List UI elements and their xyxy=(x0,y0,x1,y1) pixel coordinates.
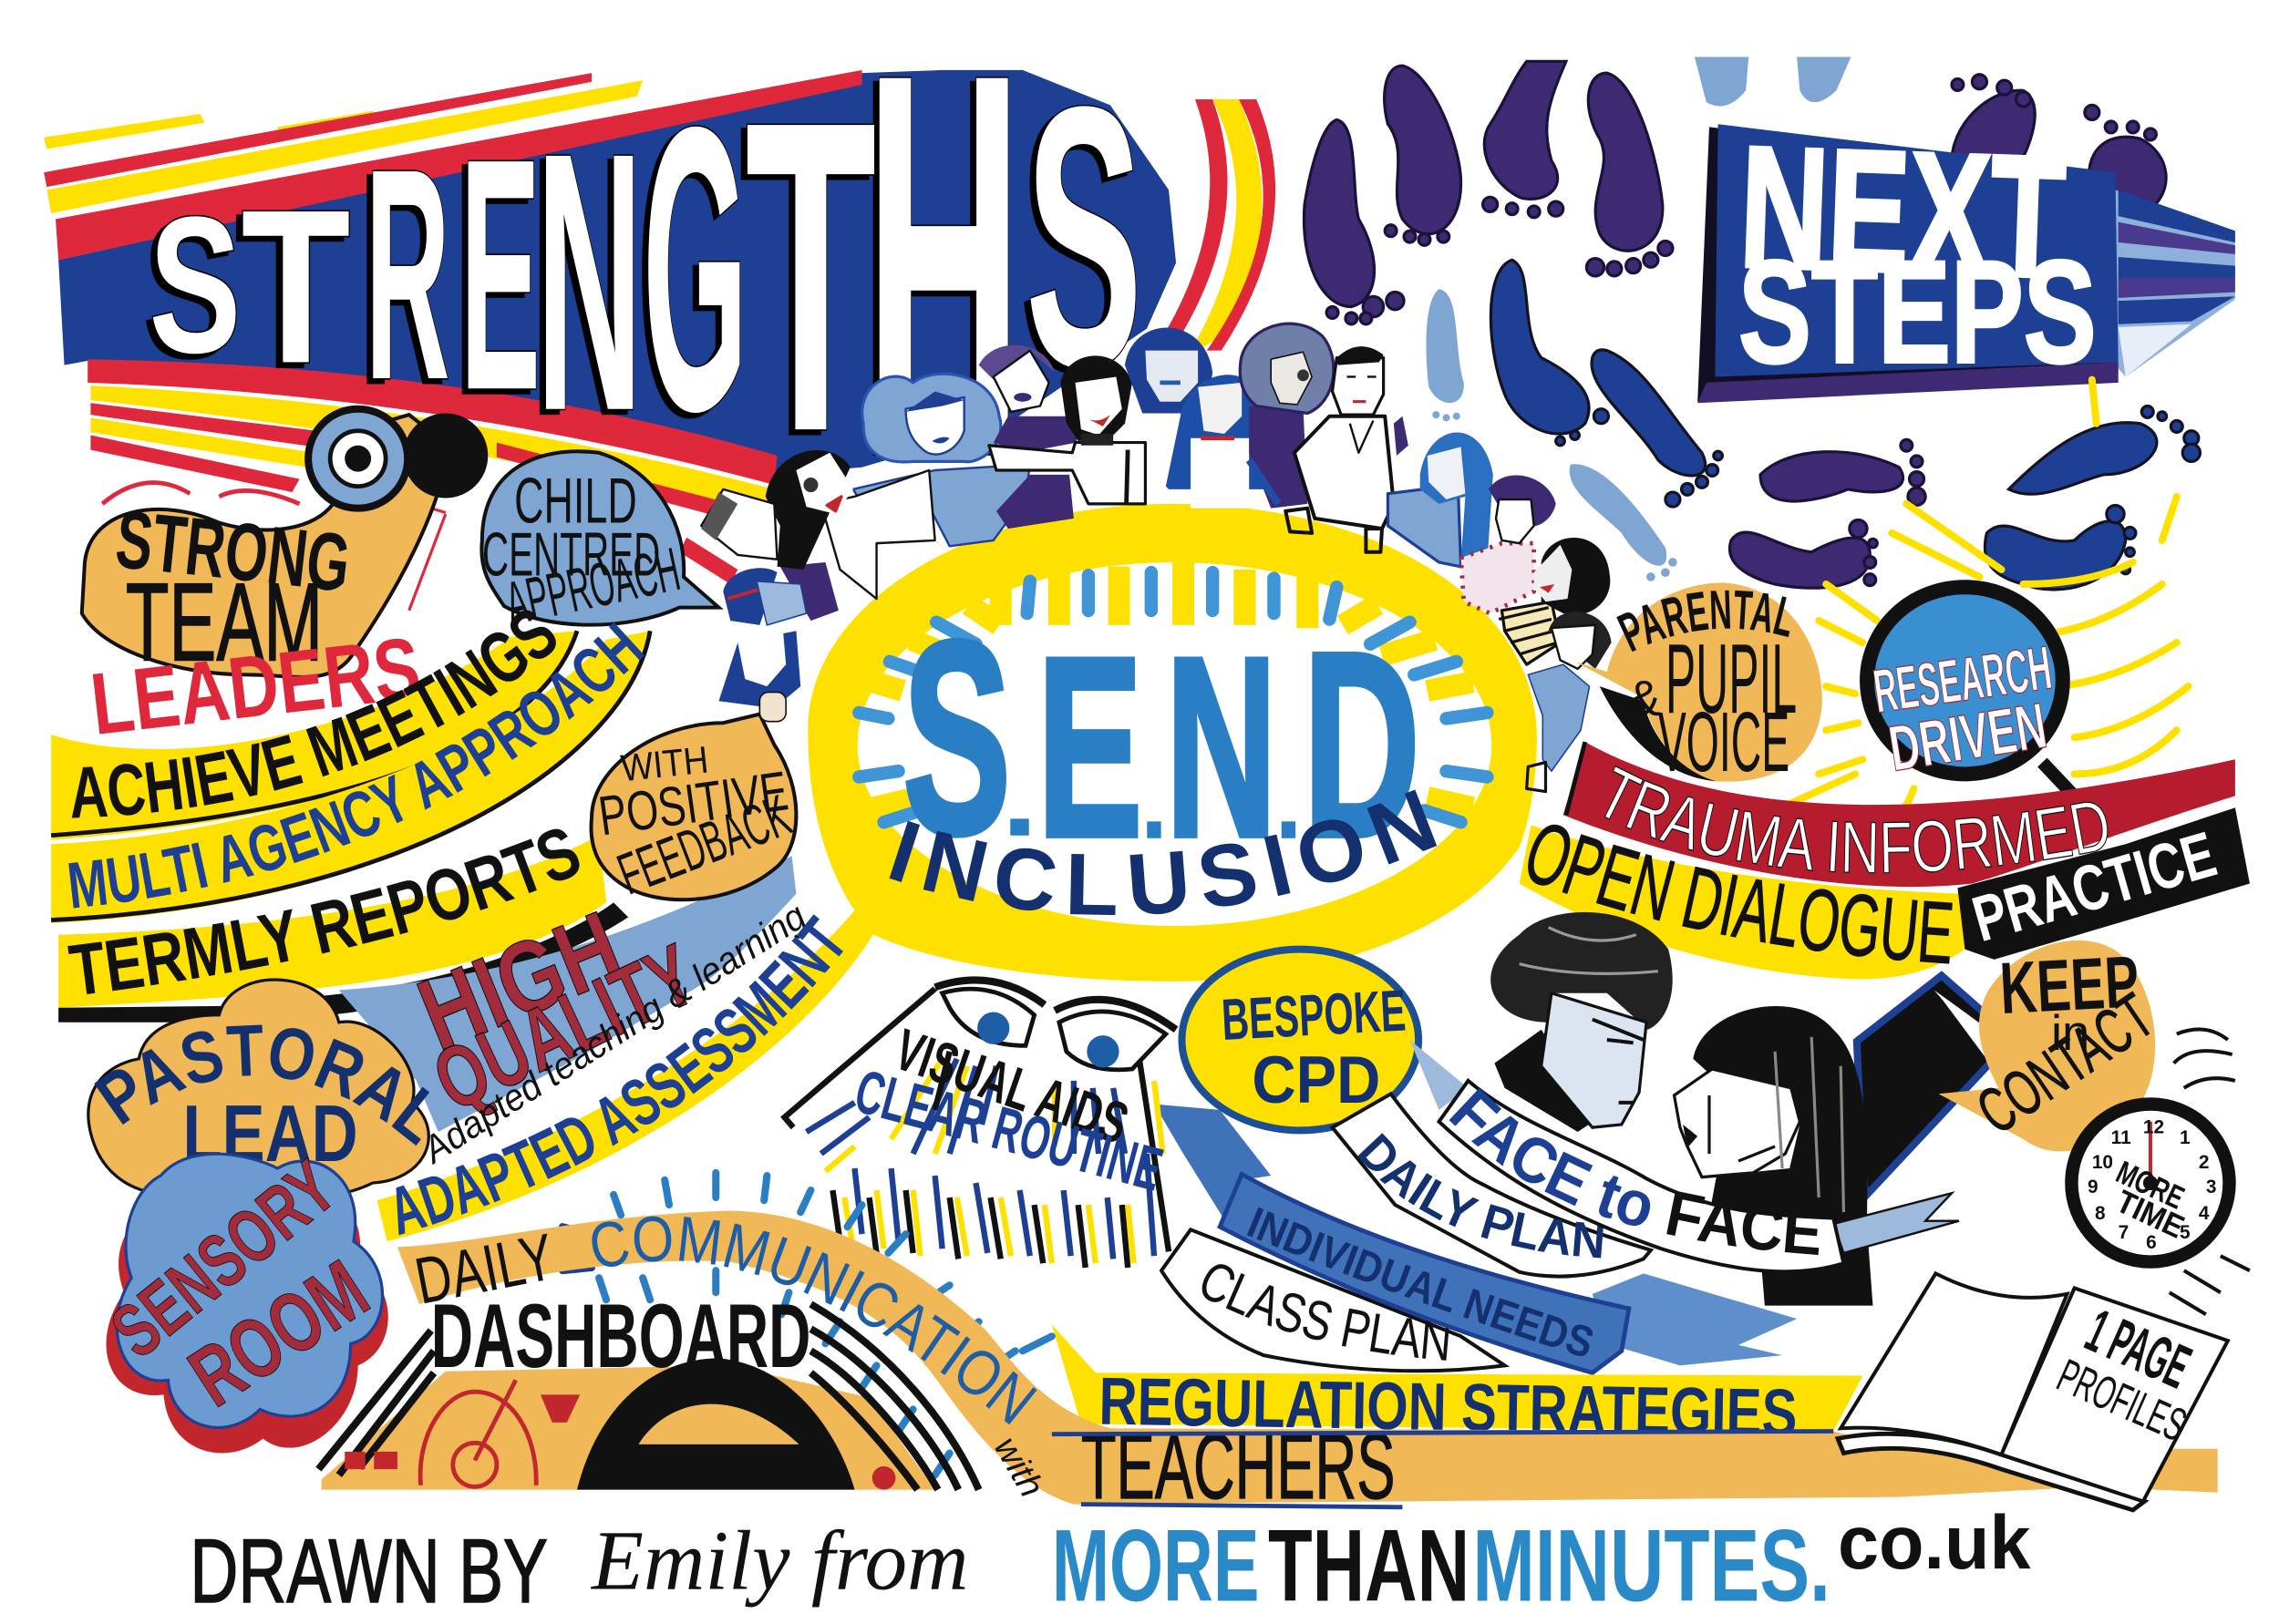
credit: more than minutes: MINUTES. xyxy=(1472,1507,1830,1622)
text: strong team: TEAM xyxy=(126,560,323,684)
icon: clock: TIME xyxy=(2110,1184,2190,1246)
panel: bespoke cpd: CPD xyxy=(1252,1042,1380,1117)
text: inclusion: INCLUSION xyxy=(890,789,1437,915)
credit: more than minutes: MORE xyxy=(1052,1507,1259,1622)
credit: drawn by emily xyxy=(190,1515,969,1622)
panel: face to face ribbon: FACE to FACE xyxy=(1449,1088,1820,1256)
credit: drawn by emily: DRAWN BY xyxy=(190,1521,548,1622)
panel: dashboard: DASHBOARD xyxy=(431,1286,810,1387)
icon: clock: 9 xyxy=(2088,1177,2099,1197)
title: strengths lettering: S xyxy=(149,177,241,394)
panel: parental and pupil voice bubble: PARENTAL xyxy=(1616,591,1790,653)
credit: drawn by emily: Emily from xyxy=(590,1515,969,1609)
icon: speedometer xyxy=(420,1380,536,1486)
title: send: N xyxy=(1166,605,1277,890)
icon: phone xyxy=(1857,975,2013,1196)
figure: man with scribbled hair xyxy=(701,489,778,560)
panel: visual aids eyes: VISUAL AIDS xyxy=(887,1016,1136,1156)
panel: daily communication band xyxy=(361,1168,2224,1518)
icon: motion lines near clock xyxy=(2170,1029,2250,1314)
text: adapted teaching: Adapted teaching & learning xyxy=(413,894,813,1172)
panel: termly reports band: TERMLY REPORTS xyxy=(67,829,580,994)
panel: with positive feedback bubble: POSITIVE xyxy=(595,759,791,848)
credit: more than minutes xyxy=(1052,1500,2031,1622)
icon: clock: 6 xyxy=(2146,1232,2157,1253)
icon: dumbbell xyxy=(308,409,488,509)
icon: clock: 1 xyxy=(2180,1127,2191,1148)
panel: individual needs ribbon xyxy=(1160,1105,1797,1374)
panel: keep in contact: KEEP xyxy=(1998,940,2140,1029)
panel: child centred speech bubble: APPROACH xyxy=(500,535,686,639)
panel: parental and pupil voice bubble: VOICE xyxy=(1658,694,1789,789)
title: strengths lettering: G xyxy=(643,44,748,496)
panel: with positive feedback bubble: WITH xyxy=(619,738,710,789)
panel: dashboard xyxy=(318,1286,979,1490)
title: next steps xyxy=(1738,111,2097,393)
panel: parental and pupil voice bubble: & xyxy=(1627,671,1661,726)
panel: parental and pupil voice bubble: PUPIL xyxy=(1665,623,1797,735)
icon: clock: 11 xyxy=(2111,1127,2131,1148)
panel: individual needs ribbon: INDIVIDUAL NEEDS xyxy=(1247,1207,1593,1356)
panel: regulation strategies band: REGULATION STRATEGIES xyxy=(1098,1362,1798,1451)
figure: man in white shirt xyxy=(1285,346,1408,552)
panel: send yellow ring xyxy=(808,503,1537,982)
panel: bespoke cpd: BESPOKE xyxy=(1220,978,1408,1053)
title: send: . xyxy=(1145,769,1163,851)
figure: purple haired woman xyxy=(979,345,1077,453)
title: strengths lettering: T xyxy=(745,28,877,523)
figure: woman with long black hair xyxy=(1675,1006,1872,1306)
text: strong team: STRONG xyxy=(117,512,346,591)
panel: sensory room cloud xyxy=(96,1145,388,1454)
panel: pastoral lead cloud: PASTORAL xyxy=(94,1024,430,1146)
panel: high quality xyxy=(339,856,813,1172)
title: send: . xyxy=(1008,766,1031,848)
panel: sensory room cloud: SENSORY xyxy=(96,1145,351,1374)
icon: clock: 3 xyxy=(2206,1177,2216,1197)
panel: daily communication band: COMMUNICATION xyxy=(592,1216,1037,1425)
icon: clock: 10 xyxy=(2092,1152,2113,1173)
title: strengths lettering: E xyxy=(460,89,541,458)
panel: multi agency band: MULTI AGENCY APPROACH xyxy=(68,622,645,908)
figure: woman with short curly hair xyxy=(1490,912,1673,1132)
figure: purple hair woman in dotted blouse xyxy=(1461,475,1556,613)
panel: high quality: QUALITY xyxy=(419,926,710,1130)
panel: pastoral lead cloud xyxy=(87,978,430,1193)
icon: arched road xyxy=(318,1304,979,1490)
title: send: E xyxy=(1037,605,1142,890)
icon: eyes xyxy=(935,980,1176,1070)
speech bubble xyxy=(1939,940,2155,1151)
figure: girl with glasses and white top xyxy=(766,450,935,621)
figure: long blue haired man xyxy=(1125,328,1212,414)
icon: sunburst dashes xyxy=(859,572,1487,822)
icon: yellow rays xyxy=(1775,380,2189,861)
title: send: . xyxy=(1280,769,1297,851)
title: send xyxy=(902,583,1420,892)
credit: more than minutes: co.uk xyxy=(1838,1500,2031,1585)
text: strong team xyxy=(117,512,346,684)
panel: keep in contact: CONTACT xyxy=(1964,980,2166,1147)
panel: achieve meetings band: ACHIEVE MEETINGS xyxy=(71,611,556,818)
panel: child centred speech bubble: CENTRED xyxy=(482,520,660,589)
panel: next steps footprints xyxy=(1304,57,2200,590)
icon: clock: 8 xyxy=(2095,1203,2106,1224)
figure: long blue hair woman in blue top xyxy=(1387,433,1493,567)
icon: purple footprints xyxy=(1304,61,2166,588)
panel: regulation strategies band xyxy=(1052,1324,1862,1451)
panel: class plan ribbon: CLASS PLAN xyxy=(1201,1264,1449,1361)
figure: blue haired girl with necklace xyxy=(1166,375,1278,509)
panel: research driven magnifier xyxy=(1775,380,2189,861)
panel: high quality: HIGH xyxy=(404,889,636,1072)
title: strengths lettering: N xyxy=(536,76,643,488)
panel: child centred speech bubble: CHILD xyxy=(514,465,637,537)
icon: navy footprints xyxy=(1490,260,2200,590)
panel: adapted assessment band: ADAPTED ASSESSMENT xyxy=(396,914,843,1236)
icon: light blue footprints xyxy=(1426,57,1851,581)
figure: person in cap xyxy=(723,568,807,625)
panel: daily plan ribbon xyxy=(1329,1092,1654,1279)
panel: with positive feedback bubble: FEEDBACK xyxy=(609,782,799,907)
panel: child centred speech bubble xyxy=(481,451,718,639)
panel: face to face ribbon xyxy=(1409,1040,1960,1272)
figure: dark haired woman in stripes xyxy=(1499,538,1610,664)
icon: clock: 4 xyxy=(2199,1203,2210,1224)
figure: boy in blue jumper xyxy=(1527,612,1612,792)
credit: more than minutes: THAN xyxy=(1268,1507,1469,1622)
panel: with positive feedback bubble xyxy=(592,714,799,907)
panel: book with one page profiles: PROFILES xyxy=(2050,1349,2194,1451)
icon: clock: 7 xyxy=(2119,1222,2129,1243)
title: send: S xyxy=(902,583,1011,890)
panel: strong team arm xyxy=(80,405,489,684)
panel: visual aids eyes: CLEAR ROUTINE xyxy=(848,1057,1170,1205)
icon: dashboard lights xyxy=(345,1394,895,1490)
panel: research driven magnifier: DRIVEN xyxy=(1884,689,2051,785)
title: send: D xyxy=(1303,599,1420,892)
text: with: with xyxy=(986,1430,1051,1504)
title: next steps: STEPS xyxy=(1738,230,2097,393)
panel: keep in contact: in xyxy=(2051,1005,2089,1061)
icon: clock: 2 xyxy=(2199,1152,2209,1173)
panel: next steps banner xyxy=(1697,111,2235,403)
panel: pastoral lead cloud: LEAD xyxy=(182,1088,358,1178)
panel: visual aids eyes xyxy=(785,980,1176,1268)
panel: keep in contact xyxy=(1857,940,2166,1196)
icon: yellow teeth xyxy=(873,562,1472,807)
title: next steps: NEXT xyxy=(1738,111,2068,314)
panel: trauma informed band: TRAUMA INFORMED xyxy=(1604,766,2108,873)
title: strengths lettering: R xyxy=(366,106,450,442)
icon: clock xyxy=(2071,1105,2229,1262)
panel: class plan ribbon xyxy=(1160,1227,1510,1372)
text: leaders: LEADERS xyxy=(86,620,425,754)
panel: book with one page profiles xyxy=(1838,1273,2228,1510)
panel: group of people xyxy=(701,324,1612,792)
panel: daily communication band: DAILY xyxy=(409,1220,560,1319)
title: strengths lettering xyxy=(149,0,1142,565)
panel: research driven magnifier: RESEARCH xyxy=(1870,633,2056,726)
icon: clock: 12 xyxy=(2143,1117,2164,1138)
panel: open dialogue band: OPEN DIALOGUE xyxy=(1528,824,1953,964)
figure: curly haired woman xyxy=(989,355,1145,504)
icon: tears rays xyxy=(785,989,1169,1268)
icon: blue dashes around communication xyxy=(562,1173,1059,1475)
figure: girl with blue hair and hand xyxy=(718,631,800,722)
title: strengths lettering: T xyxy=(241,163,351,408)
figure: curly haired person xyxy=(1240,324,1334,509)
icon: clock: MORE xyxy=(2110,1155,2190,1217)
icon: clock: 5 xyxy=(2180,1222,2191,1243)
panel: bespoke cpd xyxy=(1181,950,1418,1130)
panel: parental and pupil voice bubble xyxy=(1575,582,1822,789)
panel: strengths banner: S xyxy=(1026,31,1142,445)
panel: faces xyxy=(1490,912,1872,1306)
figure: blue haired girl xyxy=(853,374,1074,546)
text: teachers: TEACHERS xyxy=(1081,1413,1395,1518)
panel: daily plan ribbon: DAILY PLAN xyxy=(1357,1133,1604,1258)
panel: sensory room cloud: ROOM xyxy=(173,1242,384,1424)
panel: strengths banner xyxy=(44,0,1275,584)
